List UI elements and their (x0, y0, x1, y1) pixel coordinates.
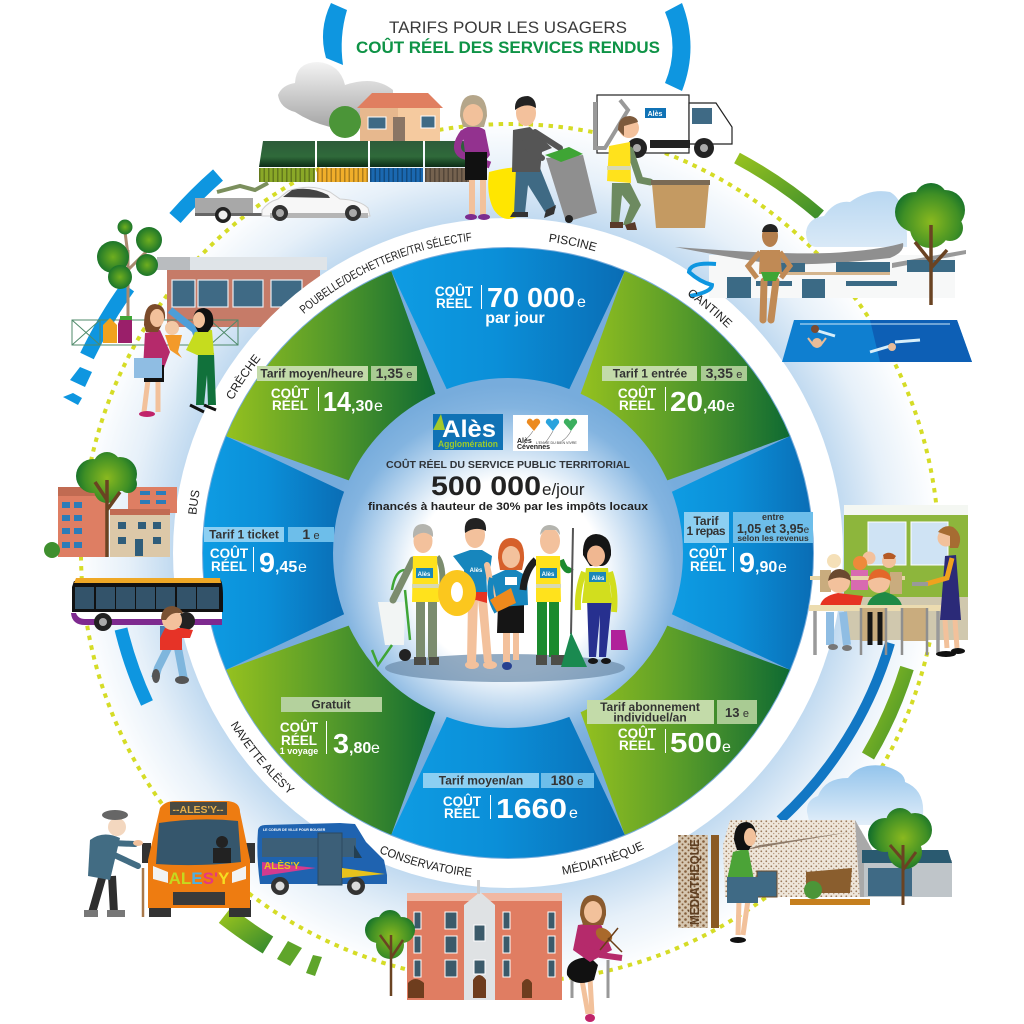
panel: cantine, 9,90 e (672, 436, 813, 670)
playground fence (72, 320, 238, 345)
tree (895, 183, 965, 305)
educator (186, 308, 216, 412)
centre: heading text: 500 000 (431, 471, 541, 501)
illustration: navette Alès'Y (84, 801, 387, 917)
car and trailer (195, 183, 370, 223)
dotted yellow circle (81, 124, 939, 982)
agent with rake (523, 525, 587, 667)
agent woman with bag (578, 534, 628, 664)
panel: cantine, 9,90 e: COÛT (689, 546, 728, 561)
panel: poubelle, top sector 70 000: 70 000 (487, 282, 575, 313)
tree (76, 452, 137, 557)
panel: conservatoire, 1660 e: Tarif moyen/an (439, 774, 523, 788)
panel: bus, 9,45 e (203, 436, 344, 670)
building (407, 880, 562, 1000)
sorting containers (259, 141, 470, 182)
panel: cantine, 9,90 e: 1,05 et 3,95e (737, 522, 810, 536)
blue shuttle: LE COEUR DE VILLE POUR BOUGER (263, 828, 326, 832)
pool building (675, 243, 966, 298)
label: conservatoire: CONSERVATOIRE (380, 846, 472, 877)
panel: navette, 3,80 e: 1 voyage (280, 746, 318, 756)
panel: piscine, 20,40 e: 20 (670, 386, 703, 417)
orange minibus (142, 801, 255, 917)
agent swimmer (438, 518, 497, 669)
illustration: school canteen (809, 505, 968, 657)
panel: cantine, 9,90 e: 9 (739, 547, 755, 578)
panel: piscine, 20,40 e: e (726, 398, 735, 415)
violinist (567, 895, 622, 1022)
label: bus: BUS (188, 490, 200, 514)
illustration: swimming pool (675, 183, 972, 362)
collection truck (595, 95, 732, 158)
blue cloud (806, 191, 907, 247)
centre: heading text (368, 458, 649, 513)
label: cantine: CANTINE (688, 290, 732, 328)
tree (868, 808, 932, 905)
blue cloud (807, 765, 923, 825)
agent with rake: Alès (542, 572, 555, 578)
panel: bus, 9,45 e: e (298, 559, 307, 576)
label: crèche: CRÈCHE (226, 354, 261, 399)
panel: poubelle, top sector 70 000: COÛT (435, 284, 474, 299)
panel: bus, 9,45 e: 1 e (302, 526, 320, 542)
orange minibus: ALES'Y (169, 869, 230, 888)
panel: navette, 3,80 e: e (371, 740, 380, 757)
panel: conservatoire, 1660 e: 1660 (496, 793, 567, 824)
panel: piscine, 20,40 e: ,40 (703, 398, 725, 415)
panel: médiathèque, 500 e: e (722, 739, 731, 756)
play house (103, 316, 132, 343)
panel: cantine, 9,90 e: Tarif (693, 514, 720, 528)
panel: médiathèque, 500 e: 13 e (725, 705, 749, 720)
sign (678, 835, 719, 928)
panel: médiathèque, 500 e: RÉEL (619, 738, 655, 753)
old man with cane (84, 810, 143, 917)
logo: Alès Cévennes: Cévennes (517, 444, 550, 451)
tree (97, 220, 162, 320)
panel: médiathèque, 500 e: 500 (670, 727, 722, 758)
panel: bus, 9,45 e: 9 (259, 547, 275, 578)
illustration: médiathèque (678, 765, 952, 943)
logo: Alès Agglomération: Alès (442, 416, 496, 443)
agent woman with folder (490, 538, 528, 670)
logo: Alès Cévennes (513, 415, 588, 451)
bus (71, 578, 223, 631)
bush (44, 542, 60, 558)
logo: Alès Agglomération (433, 414, 503, 450)
illustration: urban bus (44, 452, 223, 684)
panel: cantine, 9,90 e: selon les revenus (737, 533, 809, 543)
logo: Alès Cévennes: Alès (517, 438, 532, 445)
panel: navette, 3,80 e: Gratuit (311, 698, 351, 712)
collection truck: Alès (648, 111, 662, 118)
panel: médiathèque, 500 e (581, 626, 790, 835)
mother with shopping bag (134, 304, 170, 417)
small annex (864, 860, 952, 897)
panel: navette, 3,80 e: 3 (333, 728, 349, 759)
panel: conservatoire, 1660 e: COÛT (443, 794, 482, 809)
grey cloud (278, 62, 393, 127)
panel: crèche, 14,30 e: 14 (323, 386, 351, 417)
panel: crèche, 14,30 e: Tarif moyen/heure (260, 366, 364, 380)
agent with cart (372, 524, 442, 665)
panel: conservatoire, 1660 e: e (569, 805, 578, 822)
centre: heading text: financés à hauteur de 30% par les impôts locaux (368, 501, 649, 513)
swimmer man (748, 224, 790, 320)
panel: bus, 9,45 e: COÛT (210, 546, 249, 561)
panel: bus, 9,45 e: RÉEL (211, 559, 247, 574)
illustration: recycling scene (195, 62, 732, 230)
bush (329, 106, 361, 138)
panel: crèche, 14,30 e: ,30 (351, 398, 373, 415)
panel: piscine, 20,40 e: RÉEL (619, 398, 655, 413)
illustration: conservatoire (365, 880, 622, 1022)
panel: crèche, 14,30 e (226, 271, 435, 480)
apartment buildings (58, 487, 177, 557)
crèche building (157, 257, 327, 327)
agent swimmer: Alès (470, 568, 483, 574)
blue shuttle (257, 823, 387, 895)
panel: bus, 9,45 e: ,45 (275, 559, 297, 576)
sign: MÉDIATHÈQUE (687, 839, 702, 925)
baby and slide (165, 310, 200, 358)
panel: crèche, 14,30 e: e (374, 398, 383, 415)
panel: navette, 3,80 e: COÛT (280, 720, 319, 735)
logo: Alès Agglomération: Agglomération (438, 439, 498, 450)
house (357, 93, 443, 141)
swimming pool basin (782, 320, 972, 362)
central disc (202, 247, 814, 859)
panel: navette, 3,80 e (226, 626, 435, 835)
panel: crèche, 14,30 e: RÉEL (272, 398, 308, 413)
centre: heading text: COÛT RÉEL DU SERVICE PUBLIC TERRITORIAL (386, 458, 631, 471)
panel: cantine, 9,90 e: 1 repas (686, 524, 726, 538)
title (323, 3, 690, 91)
centre: logos (433, 414, 588, 451)
woman with bag (727, 822, 758, 943)
panel: bus, 9,45 e: Tarif 1 ticket (209, 528, 279, 542)
panel: navette, 3,80 e: RÉEL (281, 733, 317, 748)
panel: cantine, 9,90 e: RÉEL (690, 559, 726, 574)
schoolboy (152, 606, 193, 684)
main building (723, 820, 952, 905)
man with wheelie bin (510, 96, 597, 223)
panel: conservatoire, 1660 e (391, 717, 625, 858)
worker with brown bin (607, 116, 710, 230)
centre: team of agents (372, 518, 628, 682)
label: médiathèque: MÉDIATHÈQUE (562, 841, 644, 875)
illustration: crèche (72, 220, 238, 417)
agent woman with bag: Alès (592, 576, 605, 582)
panel: crèche, 14,30 e: 1,35 e (376, 365, 412, 381)
title line 2: COÛT RÉEL DES SERVICES RENDUS (356, 38, 660, 57)
panel: piscine, 20,40 e (581, 271, 790, 480)
panel: poubelle, top sector 70 000: RÉEL (436, 296, 472, 311)
panel: cantine, 9,90 e: entre (762, 512, 784, 522)
panel: médiathèque, 500 e: individuel/an (613, 710, 687, 724)
panel: piscine, 20,40 e: 3,35 e (706, 365, 742, 381)
label: piscine: PISCINE (549, 234, 597, 252)
panel: crèche, 14,30 e: COÛT (271, 386, 310, 401)
panel: médiathèque, 500 e: COÛT (618, 726, 657, 741)
logo: Alès Cévennes: L'ENVIE DU BIEN VIVRE (536, 441, 577, 445)
panel: piscine, 20,40 e: Tarif 1 entrée (613, 366, 688, 380)
panel: poubelle, top sector 70 000: e (577, 294, 586, 311)
background halo (78, 123, 938, 983)
children at table (809, 552, 942, 655)
panel: poubelle, top sector 70 000 (391, 248, 625, 389)
canteen room (844, 505, 968, 640)
woman with bag (457, 95, 524, 220)
decorative outer arcs (63, 158, 907, 976)
tree (365, 910, 415, 996)
panel: conservatoire, 1660 e: 180 e (551, 772, 583, 788)
panel: médiathèque, 500 e: Tarif abonnement (600, 700, 700, 714)
agent with cart: Alès (418, 572, 431, 578)
label: poubelle: POUBELLE/DECHETTERIE/TRI SÉLECTIF (299, 232, 472, 314)
title brackets (323, 3, 690, 91)
panel: piscine, 20,40 e: COÛT (618, 386, 657, 401)
panel: cantine, 9,90 e: e (778, 559, 787, 576)
panel: conservatoire, 1660 e: RÉEL (444, 806, 480, 821)
panel: poubelle, top sector 70 000: par jour (485, 310, 545, 327)
ring labels (188, 232, 732, 877)
server woman (912, 526, 965, 657)
centre: heading text: e/jour (542, 480, 585, 499)
panel: cantine, 9,90 e: ,90 (755, 559, 777, 576)
white service ring (173, 218, 843, 888)
orange minibus: --ALES'Y-- (173, 804, 224, 816)
title line 1: TARIFS POUR LES USAGERS (389, 18, 627, 37)
ground shadow (385, 654, 625, 682)
blue shuttle: ALÈS'Y (264, 859, 300, 872)
label: navette: NAVETTE ALÈS'Y (230, 721, 295, 793)
panel: navette, 3,80 e: ,80 (349, 740, 371, 757)
